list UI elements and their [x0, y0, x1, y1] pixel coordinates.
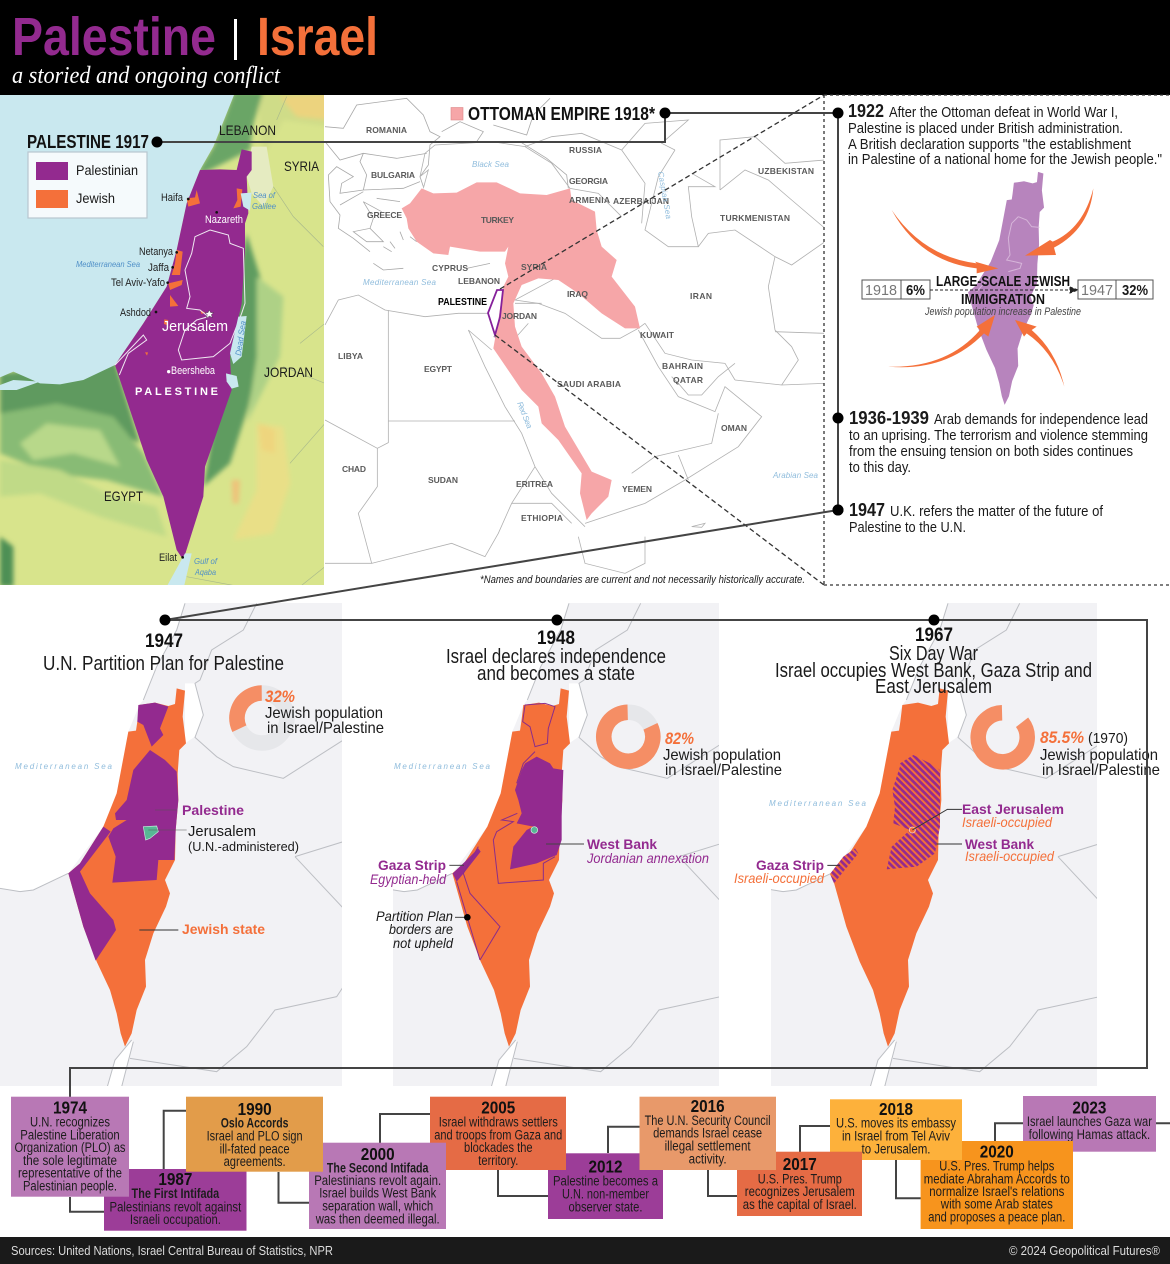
event: 1974: 1974 — [53, 1098, 87, 1118]
graphic caption: Jewish population increase in Palestine — [924, 306, 1081, 318]
event: 2005: blockades the — [464, 1140, 533, 1155]
event: 1990: Oslo Accords — [221, 1115, 288, 1130]
stat: 82% — [665, 729, 694, 748]
event: 2020: and proposes a peace plan. — [928, 1210, 1065, 1225]
event: 1974 — [11, 1097, 129, 1197]
labels — [182, 802, 299, 937]
era connector and dots — [70, 504, 1147, 1097]
text: 1947 — [849, 500, 1104, 536]
heading: U.N. Partition Plan for Palestine — [43, 653, 284, 675]
labels: (U.N.-administered) — [188, 839, 299, 854]
stat: in Israel/Palestine — [1042, 762, 1160, 779]
sea label: Mediterranean Sea — [769, 799, 867, 808]
graphic caption: LARGE-SCALE JEWISH — [936, 273, 1070, 290]
heading: 1947 — [145, 631, 183, 652]
labels: Israeli-occupied — [965, 848, 1055, 864]
labels — [370, 836, 709, 951]
subtitle: a storied and ongoing conflict — [12, 63, 281, 89]
map — [393, 603, 719, 1086]
labels: Jerusalem — [188, 824, 256, 840]
text: 1922: After the Ottoman defeat in World War I, — [889, 105, 1118, 121]
country labels: SAUDI ARABIA — [557, 379, 621, 389]
Palestine outline — [488, 290, 503, 335]
labels: West Bank — [965, 836, 1034, 852]
event: 1987: Israeli occupation. — [130, 1212, 221, 1227]
country labels: LEBANON — [458, 276, 500, 286]
event: 1987: The First Intifada — [132, 1186, 220, 1201]
legend — [28, 152, 147, 218]
country labels — [338, 125, 819, 523]
event: 2020: U.S. Pres. Trump helps — [939, 1158, 1054, 1173]
event: 2000: The Second Intifada — [327, 1160, 429, 1175]
event: 2018 — [830, 1099, 962, 1160]
country labels: CYPRUS — [432, 263, 468, 273]
graphic caption: IMMIGRATION — [961, 291, 1045, 308]
text: 1947: 1947 — [849, 500, 885, 520]
event: 2017: recognizes Jerusalem — [745, 1184, 855, 1199]
labels: Jordanian annexation — [586, 850, 709, 866]
event: 1987: Palestinians revolt against — [110, 1200, 241, 1215]
event: 2018: U.S. moves its embassy — [836, 1116, 956, 1131]
event: 1974: Palestinian people. — [23, 1178, 117, 1193]
map labels: Aqaba — [194, 567, 216, 577]
country labels: Black Sea — [472, 160, 510, 169]
heading: Israel declares independence — [446, 646, 666, 668]
timeline connector — [152, 108, 844, 516]
country labels: ARMENIA — [569, 195, 610, 205]
panel: Palestine 1917 map — [0, 90, 330, 587]
stat: in Israel/Palestine — [267, 720, 384, 737]
stat: in Israel/Palestine — [665, 762, 782, 779]
title: Israel — [257, 7, 378, 67]
map — [0, 603, 342, 1086]
map — [771, 603, 1097, 1086]
country labels: QATAR — [673, 375, 703, 385]
heading: Israel occupies West Bank, Gaza Strip and — [775, 660, 1092, 682]
panel: 1947 partition map — [0, 597, 400, 1087]
title — [12, 7, 378, 67]
country labels: TURKEY — [481, 215, 514, 225]
1947 value: 32% — [1122, 282, 1148, 299]
country labels: YEMEN — [622, 484, 652, 494]
country labels: EGYPT — [424, 364, 453, 374]
event: 2012: U.N. non-member — [562, 1186, 649, 1201]
map heading: PALESTINE 1917 — [27, 132, 149, 152]
footer: Sources: United Nations, Israel Central Bureau of Statistics, NPR — [11, 1243, 333, 1258]
zoom guide lines — [495, 95, 1170, 585]
Ottoman Empire territory — [402, 182, 640, 520]
country labels: Arabian Sea — [772, 471, 819, 480]
event: 2016: 2016 — [691, 1096, 725, 1116]
map labels: SYRIA — [284, 158, 320, 174]
sea label: Mediterranean Sea — [15, 762, 113, 771]
event: 2016: demands Israel cease — [653, 1126, 762, 1141]
event: 2018: to Jerusalem. — [862, 1141, 930, 1156]
1947 value: 1947 — [1081, 282, 1113, 299]
text: 1922: A British declaration supports "the establishment — [848, 137, 1131, 153]
map labels: Nazareth — [205, 214, 243, 226]
map labels: Eilat — [159, 552, 177, 564]
labels: Palestine — [182, 802, 244, 818]
map labels: Jaffa — [148, 262, 170, 274]
1918 value: 6% — [906, 282, 925, 299]
labels: Jewish state — [182, 921, 265, 937]
event: 2012: 2012 — [588, 1157, 623, 1177]
event: 2017: as the capital of Israel. — [743, 1197, 857, 1212]
event: 2018: 2018 — [879, 1099, 913, 1119]
text: 1947: Palestine to the U.N. — [849, 520, 966, 536]
map labels: Dead Sea — [233, 320, 248, 356]
country labels: RUSSIA — [569, 145, 602, 155]
map labels: Beersheba — [171, 365, 216, 377]
country labels: BAHRAIN — [662, 361, 703, 371]
stat: Jewish population — [663, 747, 781, 764]
event: 2020: 2020 — [980, 1141, 1014, 1161]
country labels: ERITREA — [516, 479, 553, 489]
title: Palestine — [12, 7, 216, 67]
map labels: Haifa — [161, 192, 184, 204]
event: 2017: 2017 — [783, 1154, 817, 1174]
event: 1974: U.N. recognizes — [30, 1115, 110, 1130]
event: 2000 — [309, 1143, 446, 1229]
event: 2005: and troops from Gaza and — [434, 1127, 562, 1142]
stat: (1970) — [1088, 730, 1128, 747]
connectors — [70, 1111, 1170, 1212]
legend: Jewish — [76, 190, 115, 206]
event: 1974: representative of the — [18, 1166, 122, 1181]
country labels: IRAQ — [567, 289, 588, 299]
map labels: Tel Aviv-Yafo — [111, 277, 165, 289]
map labels: Gulf of — [194, 556, 218, 566]
event: 2000: 2000 — [361, 1144, 395, 1164]
country labels: PALESTINE — [438, 296, 487, 308]
sea — [0, 95, 234, 384]
event: 2000: separation wall, which — [322, 1199, 433, 1214]
lakes — [167, 193, 252, 587]
event: 2020 — [921, 1141, 1073, 1229]
event: 2000: was then deemed illegal. — [315, 1211, 440, 1226]
map labels: Mediterranean Sea — [76, 259, 140, 269]
event: 2012: Palestine becomes a — [553, 1174, 658, 1189]
header banner — [0, 0, 1170, 95]
map labels: Netanya — [139, 246, 174, 258]
heading: 1967 — [915, 625, 953, 646]
event: 1974: Palestine Liberation — [20, 1127, 120, 1142]
event: 2020: normalize Israel's relations — [929, 1184, 1065, 1199]
country labels: JORDAN — [502, 311, 537, 321]
country labels: ROMANIA — [366, 125, 407, 135]
donut — [229, 685, 295, 751]
event: 2016 — [640, 1096, 776, 1170]
event: 1987: 1987 — [158, 1169, 192, 1189]
event: 2023: 2023 — [1072, 1097, 1107, 1117]
stat — [1040, 728, 1160, 779]
event: 2000: Israel builds West Bank — [319, 1186, 436, 1201]
event: 2005: Israel withdraws settlers — [439, 1115, 558, 1130]
map labels: LEBANON — [219, 122, 276, 138]
Ottoman Empire heading: OTTOMAN EMPIRE 1918* — [468, 104, 655, 124]
event: 2017 — [737, 1152, 862, 1216]
country labels: SYRIA — [521, 262, 547, 272]
country labels: GREECE — [367, 210, 402, 220]
country labels: Red Sea — [515, 400, 534, 430]
sea label: Mediterranean Sea — [394, 762, 491, 771]
panel: 1948 independence map — [351, 597, 784, 1087]
donut — [596, 704, 661, 769]
terrain — [0, 90, 330, 587]
event: 1990: 1990 — [238, 1099, 272, 1119]
text: 1922 — [848, 101, 1162, 168]
labels: Israeli-occupied — [962, 814, 1053, 830]
heading: Six Day War — [889, 643, 978, 665]
country labels: LIBYA — [338, 351, 363, 361]
text: 1922: 1922 — [848, 101, 884, 121]
event: 2005: 2005 — [481, 1097, 516, 1117]
map labels: EGYPT — [104, 488, 143, 504]
event: 2023: following Hamas attack. — [1029, 1127, 1150, 1142]
country labels: AZERBAIJAN — [613, 196, 669, 206]
Ottoman Empire heading — [450, 107, 655, 120]
country labels: Mediterranean Sea — [363, 278, 437, 287]
country labels: Caspian Sea — [656, 171, 673, 220]
increase arrow — [930, 287, 1078, 293]
heading — [775, 625, 1092, 698]
country labels: ETHIOPIA — [521, 513, 563, 523]
text: 1936-1939: to this day. — [849, 460, 911, 476]
event: 2016: activity. — [689, 1151, 727, 1166]
donut — [968, 703, 1037, 772]
stat: 32% — [265, 687, 295, 706]
country labels: KUWAIT — [640, 330, 675, 340]
text: 1936-1939 — [849, 408, 1148, 476]
map labels: Sea of — [253, 190, 276, 200]
event: 2023 — [1023, 1096, 1156, 1152]
West Bank and Gaza outline — [115, 230, 245, 375]
country labels: UZBEKISTAN — [758, 166, 814, 176]
country labels: IRAN — [690, 291, 712, 301]
panel: Ottoman Empire map — [325, 98, 825, 586]
1918 value — [862, 280, 930, 299]
event: 2016: The U.N. Security Council — [645, 1113, 771, 1128]
stat: 85.5% — [1040, 728, 1084, 747]
labels: not upheld — [393, 935, 454, 951]
1947 value — [1078, 280, 1153, 299]
event: 1974: Organization (PLO) as — [14, 1140, 126, 1155]
stat — [663, 729, 782, 779]
event: 1990: agreements. — [224, 1154, 286, 1169]
stat — [265, 687, 384, 737]
stat: Jewish population — [1040, 747, 1158, 764]
legend: Palestinian — [76, 162, 138, 178]
event: 1990: ill-fated peace — [220, 1141, 290, 1156]
map labels: JORDAN — [264, 364, 313, 380]
event: 2020: with some Arab states — [940, 1197, 1053, 1212]
country labels: BULGARIA — [371, 170, 415, 180]
heading: 1948 — [537, 628, 575, 649]
territory — [115, 149, 252, 560]
event: 2016: illegal settlement — [665, 1139, 751, 1154]
graphic: large-scale Jewish immigration — [862, 172, 1153, 405]
stat: Jewish population — [265, 705, 383, 722]
1918 value: 1918 — [865, 282, 897, 299]
labels — [734, 801, 1064, 886]
event: 1990: Israel and PLO sign — [207, 1129, 303, 1144]
map labels: Jerusalem — [162, 318, 228, 335]
text: 1936-1939: from the ensuing tension on both sides continues — [849, 444, 1133, 460]
footnote: *Names and boundaries are current and not necessarily historically accurate. — [480, 574, 805, 586]
heading — [446, 628, 666, 685]
text: 1947: U.K. refers the matter of the future of — [890, 504, 1104, 520]
labels: West Bank — [587, 836, 657, 852]
event: 1974: the sole legitimate — [23, 1153, 117, 1168]
Jewish settlements — [145, 188, 242, 356]
event: 2018: in Israel from Tel Aviv — [842, 1129, 950, 1144]
footer — [0, 1237, 1170, 1264]
labels: Gaza Strip — [378, 857, 446, 873]
event: 2012: observer state. — [568, 1199, 642, 1214]
event: 2000: Palestinians revolt again. — [314, 1173, 441, 1188]
heading: and becomes a state — [477, 663, 635, 685]
labels: borders are — [389, 921, 453, 937]
labels: Partition Plan — [376, 908, 453, 924]
map labels: Galilee — [252, 201, 276, 211]
graphic caption — [924, 273, 1081, 318]
map labels: PALESTINE — [135, 386, 218, 398]
silhouette — [968, 172, 1044, 405]
labels: Egyptian-held — [370, 871, 447, 887]
event: 1990 — [186, 1097, 323, 1172]
text: 1936-1939: 1936-1939 — [849, 408, 929, 428]
event: 2005: territory. — [478, 1153, 518, 1168]
event: 2017: U.S. Pres. Trump — [758, 1171, 842, 1186]
country labels: GEORGIA — [569, 176, 608, 186]
country labels: SUDAN — [428, 475, 458, 485]
orange arrows — [888, 188, 1093, 387]
cities dots — [155, 198, 218, 559]
labels: Israeli-occupied — [734, 870, 825, 886]
labels: East Jerusalem — [962, 801, 1064, 817]
heading: East Jerusalem — [875, 676, 992, 698]
country labels: OMAN — [721, 423, 747, 433]
panel: 1967 Six Day War map — [730, 597, 1163, 1087]
country labels: CHAD — [342, 464, 366, 474]
text: 1936-1939: Arab demands for independence lead — [934, 412, 1148, 428]
text: 1922: Palestine is placed under British administration. — [848, 121, 1123, 137]
event: 2005 — [430, 1097, 566, 1170]
map labels: Ashdod — [120, 307, 151, 319]
country labels: TURKMENISTAN — [720, 213, 790, 223]
event: 1987 — [104, 1169, 246, 1231]
event: 2012 — [548, 1153, 663, 1219]
timeline 1974-2023 — [11, 1096, 1170, 1231]
event: 2020: mediate Abraham Accords to — [924, 1171, 1070, 1186]
country borders — [325, 98, 825, 573]
labels: Gaza Strip — [756, 857, 824, 873]
heading — [43, 631, 284, 675]
map labels — [76, 122, 320, 577]
